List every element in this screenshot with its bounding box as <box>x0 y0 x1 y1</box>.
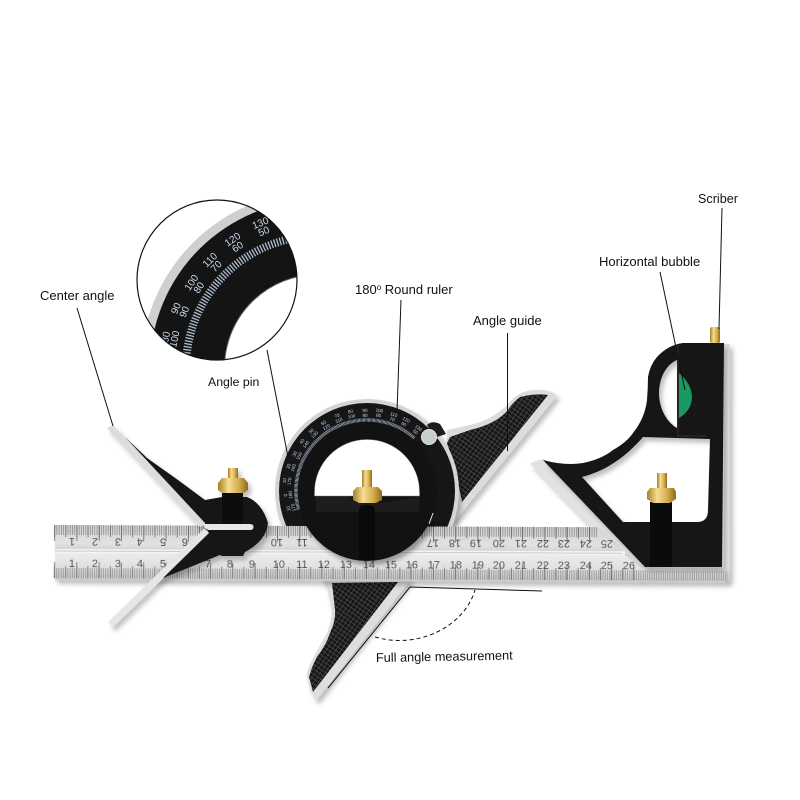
lower numbers: 23 <box>558 560 570 572</box>
upper numbers: 4 <box>137 535 143 547</box>
lower numbers: 15 <box>385 559 397 571</box>
lens silver band <box>148 206 257 329</box>
protractor inner disc <box>297 421 437 561</box>
protractor window <box>314 440 420 496</box>
brass nut <box>218 478 248 493</box>
lower numbers: 22 <box>537 560 549 572</box>
upper numbers: 24 <box>580 537 592 549</box>
protractor numbers: 160 <box>290 463 297 472</box>
protractor numbers: 40 <box>298 438 306 445</box>
lower numbers: 19 <box>472 560 484 572</box>
protractor numbers: 170 <box>290 503 297 512</box>
leader: angle pin <box>267 350 288 457</box>
leader: scriber <box>719 208 722 329</box>
protractor numbers: 30 <box>291 450 298 457</box>
protractor numbers: 110 <box>335 416 344 424</box>
scriber <box>710 327 720 343</box>
protractor numbers: 10 <box>282 477 287 484</box>
full angle guide lines <box>328 587 542 688</box>
protractor numbers: 150 <box>295 451 303 461</box>
brass stud <box>228 468 238 479</box>
knurled grip <box>447 394 548 502</box>
upper numbers: 6 <box>182 536 188 548</box>
lens numbers: 100 <box>168 329 183 348</box>
lower numbers: 9 <box>249 559 255 571</box>
label: center angle: Center angle <box>40 288 114 303</box>
bubble vial <box>679 373 692 418</box>
upper scale <box>55 525 622 553</box>
protractor numbers: 100 <box>347 413 356 420</box>
angle guide <box>446 390 557 527</box>
black body <box>125 437 268 578</box>
upper numbers: 18 <box>449 537 461 549</box>
lower numbers: 16 <box>406 559 418 571</box>
pivot knob <box>427 422 446 438</box>
lower numbers: 26 <box>623 560 635 572</box>
lower numbers: 24 <box>580 560 592 572</box>
bubble block line <box>678 345 707 436</box>
upper numbers: 21 <box>515 537 527 549</box>
upper numbers: 25 <box>601 537 613 549</box>
upper numbers: 19 <box>470 537 482 549</box>
square head body <box>543 343 724 567</box>
lens numbers <box>159 215 274 348</box>
lens numbers: 80 <box>192 280 207 296</box>
upper numbers: 10 <box>271 536 283 548</box>
protractor numbers <box>282 407 423 513</box>
upper numbers: 5 <box>160 535 166 547</box>
protractor numbers: 50 <box>308 427 315 435</box>
protractor numbers: 80 <box>347 408 354 415</box>
lens numbers: 100 <box>183 273 202 293</box>
protractor disc shadow <box>305 526 435 568</box>
lower numbers: 25 <box>601 560 613 572</box>
protractor numbers: 0 <box>283 493 288 497</box>
lower numbers: 7 <box>205 559 211 571</box>
upper scale ticks <box>54 530 597 535</box>
lower numbers: 17 <box>428 559 440 572</box>
lens numbers: 70 <box>209 259 225 275</box>
lower numbers: 3 <box>115 558 121 570</box>
lens numbers: 80 <box>160 330 173 344</box>
protractor numbers: 140 <box>302 440 311 449</box>
upper numbers: 17 <box>427 536 439 549</box>
square head silver edge <box>530 344 730 582</box>
protractor numbers: 80 <box>376 413 382 418</box>
lower numbers: 1 <box>69 558 75 570</box>
lens numbers: 120 <box>223 231 243 249</box>
slot <box>204 524 254 530</box>
protractor outer ring <box>275 399 459 583</box>
center post <box>222 490 243 524</box>
upper numbers: 1 <box>69 535 75 547</box>
bottom knurled grip <box>309 582 398 692</box>
lower numbers: 10 <box>273 559 285 571</box>
lower scale <box>55 553 725 583</box>
label: round ruler: Round ruler <box>381 282 453 297</box>
lower numbers: 8 <box>227 559 233 571</box>
lower numbers: 5 <box>160 558 166 570</box>
protractor brass stud <box>362 470 372 488</box>
protractor numbers: 90 <box>362 413 368 418</box>
leader: horizontal bubble <box>660 272 685 390</box>
upper numbers: 23 <box>558 537 570 549</box>
full angle dashed arc <box>375 590 475 640</box>
square post <box>650 502 672 567</box>
protractor numbers: 20 <box>285 463 292 469</box>
protractor numbers: 170 <box>287 477 292 485</box>
label: round ruler: o <box>377 283 382 292</box>
protractor numbers: 90 <box>362 408 368 413</box>
pivot bolt <box>422 430 436 444</box>
upper numbers: 3 <box>115 535 121 547</box>
lower numbers: 14 <box>363 559 375 571</box>
protractor brass nut <box>353 487 382 503</box>
magnifier lens <box>136 199 298 361</box>
leader: angle guide <box>506 333 508 451</box>
lens black band <box>154 212 296 360</box>
protractor numbers: 120 <box>322 423 331 431</box>
upper numbers <box>69 535 613 549</box>
lower numbers: 18 <box>450 560 462 572</box>
protractor numbers: 110 <box>390 411 399 418</box>
protractor slide channel <box>316 497 419 512</box>
label: angle guide: Angle guide <box>473 313 542 328</box>
lower numbers: 11 <box>296 559 308 571</box>
disc edge highlight <box>429 513 433 524</box>
lower numbers: 2 <box>92 558 98 570</box>
lower numbers: 20 <box>493 560 505 572</box>
lower scale ticks <box>54 570 725 576</box>
protractor tick scale <box>296 420 414 509</box>
steel ruler <box>54 525 725 583</box>
protractor numbers: 130 <box>414 424 423 433</box>
label: angle pin: Angle pin <box>208 375 259 389</box>
lower numbers: 21 <box>515 560 527 572</box>
square brass stud <box>657 473 667 489</box>
label: full angle measurement: Full angle measurement <box>376 648 513 665</box>
lens inner hole <box>224 276 296 359</box>
lens ticks <box>183 236 288 354</box>
protractor numbers: 180 <box>288 490 293 499</box>
upper numbers: 2 <box>92 535 98 547</box>
upper blade <box>107 425 207 527</box>
protractor numbers: 60 <box>320 419 328 426</box>
protractor numbers: 120 <box>402 416 411 424</box>
lens numbers: 90 <box>178 304 192 319</box>
lens numbers: 110 <box>201 251 220 270</box>
lens numbers: 60 <box>230 240 246 255</box>
protractor numbers: 100 <box>375 407 384 414</box>
protractor post <box>359 505 375 560</box>
leader: round ruler <box>397 300 401 412</box>
lower numbers <box>69 558 635 572</box>
square brass nut <box>647 488 676 503</box>
protractor numbers: 130 <box>310 430 320 439</box>
upper numbers: 22 <box>537 537 549 549</box>
lower numbers: 12 <box>318 559 330 571</box>
upper numbers: 20 <box>493 537 505 549</box>
label: round ruler: 180 <box>355 282 377 297</box>
lower numbers: 4 <box>137 558 143 570</box>
lens numbers: 130 <box>251 215 271 232</box>
label: scriber: Scriber <box>698 192 738 206</box>
center head <box>107 425 268 627</box>
lower numbers: 13 <box>340 559 352 571</box>
protractor numbers: 50 <box>412 428 419 436</box>
protractor numbers: 70 <box>389 416 396 423</box>
label: horizontal bubble: Horizontal bubble <box>599 254 700 269</box>
lens numbers: 50 <box>257 225 272 239</box>
protractor numbers: 10 <box>285 505 292 512</box>
leader: center angle <box>77 308 113 426</box>
upper numbers: 11 <box>296 536 308 548</box>
protractor numbers: 60 <box>400 421 408 428</box>
lens numbers: 90 <box>170 301 184 316</box>
bottom angle guide <box>307 578 412 701</box>
protractor numbers: 70 <box>334 412 341 419</box>
lower blade <box>108 529 210 627</box>
